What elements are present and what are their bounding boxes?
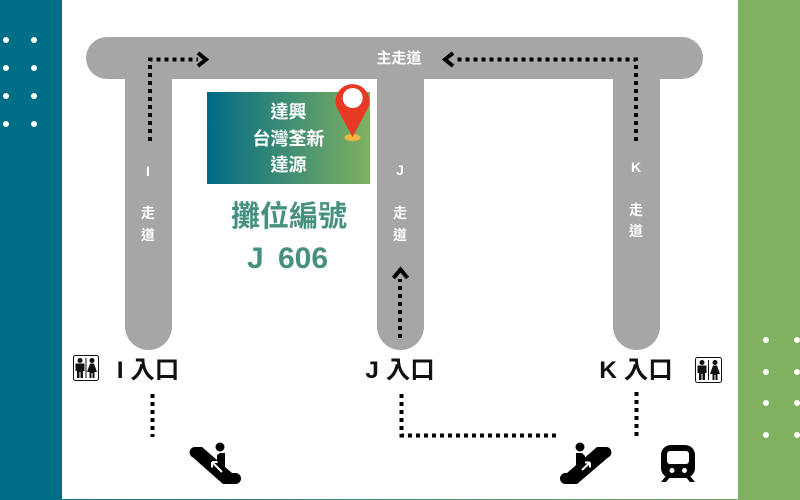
route: K entrance to station [634, 392, 638, 436]
route: J entrance to escalator [402, 394, 556, 436]
heading: booth number: 攤位編號 [231, 200, 347, 233]
bottom edge line [0, 499, 800, 500]
label: J entrance: J 入口 [365, 357, 435, 384]
label: I walkway [141, 163, 155, 243]
icon: escalator down [190, 442, 241, 484]
label: I walkway: 道 [141, 227, 155, 243]
label: K walkway [629, 159, 643, 239]
icon: location pin [336, 84, 370, 141]
corridor map: grey walkways [86, 37, 703, 350]
booth banner: 達源 [270, 155, 306, 175]
label: K walkway: K [631, 159, 641, 175]
route: I entrance to escalator [150, 394, 154, 437]
booth banner [207, 92, 370, 184]
panel: right green band [738, 0, 800, 500]
booth banner: 達興 [270, 102, 306, 122]
heading: booth number [231, 200, 347, 275]
icon: restroom left [74, 356, 98, 380]
label: J walkway [393, 162, 407, 243]
icon: restroom right [696, 358, 722, 382]
label: main walkway: 主走道 [376, 49, 422, 67]
heading: booth number: J [247, 242, 264, 275]
label: K entrance: K 入口 [599, 357, 673, 384]
label: K walkway: 道 [629, 223, 643, 239]
label: J walkway: 走 [393, 205, 407, 221]
booth banner: 台灣荃新 [252, 128, 324, 149]
heading: booth number: 606 [278, 242, 328, 275]
icon: metro train [661, 445, 695, 482]
arrow: J route up [394, 270, 408, 338]
label: I walkway: I [146, 163, 150, 179]
label: J walkway: J [396, 162, 404, 178]
icon: escalator up [560, 442, 611, 484]
arrow: K route to main walkway [445, 53, 636, 141]
panel: left teal band [0, 0, 62, 500]
label: I walkway: 走 [141, 205, 155, 221]
label: K walkway: 走 [629, 202, 643, 218]
label: J walkway: 道 [393, 227, 407, 243]
arrow: I route to main walkway [150, 53, 206, 141]
label: I entrance: I 入口 [117, 357, 179, 384]
